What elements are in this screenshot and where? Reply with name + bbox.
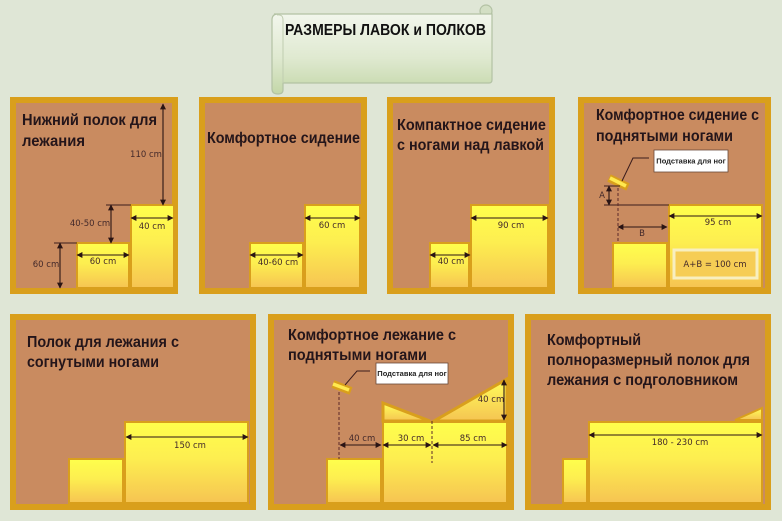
panel heading: с ногами над лавкой	[397, 137, 544, 154]
dimensions	[339, 380, 507, 463]
dimensions: 180 - 230 cm	[652, 438, 708, 448]
panel heading: Комфортное сидение с	[596, 107, 759, 124]
panel heading: лежания с подголовником	[547, 372, 738, 389]
panel: full-size shelf with headrest	[528, 317, 768, 507]
panel heading	[547, 332, 750, 389]
dimensions: 30 cm	[398, 434, 424, 444]
panel heading: Комфортное сидение	[207, 130, 360, 147]
footrest label: Подставка для ног	[656, 156, 726, 166]
panel: comfortable lying with raised legs	[271, 317, 511, 507]
dimensions: 90 cm	[498, 221, 524, 231]
dimensions: 40 cm	[349, 434, 375, 444]
footrest label	[654, 150, 728, 172]
panel: lying shelf with bent legs	[13, 317, 253, 507]
dimensions	[33, 104, 173, 288]
headrest wedges	[383, 379, 507, 421]
dimensions: 150 cm	[174, 441, 206, 451]
panel heading: Полок для лежания с	[27, 334, 179, 351]
panel heading: Комфортный	[547, 332, 641, 349]
benches	[69, 422, 248, 503]
dimensions: A	[599, 191, 605, 201]
panel heading	[596, 107, 759, 145]
dimensions	[126, 437, 248, 451]
footrest label	[376, 363, 448, 384]
dimensions: 60 cm	[90, 257, 116, 267]
panel: compact seat	[390, 100, 552, 291]
footrest leader line	[622, 158, 649, 181]
panel heading: лежания	[22, 133, 85, 150]
dimensions: 40 cm	[139, 222, 165, 232]
dimensions: 95 cm	[705, 218, 731, 228]
icon: footrest	[333, 384, 351, 391]
panel heading: Комфортное лежание с	[288, 327, 456, 344]
dimensions: 40 cm	[478, 395, 504, 405]
headrest wedge	[735, 408, 762, 420]
panel heading: полноразмерный полок для	[547, 352, 750, 369]
dimensions	[599, 186, 762, 243]
panel: comfortable seat	[202, 100, 364, 291]
panel heading: Нижний полок для	[22, 112, 157, 129]
dimensions: 85 cm	[460, 434, 486, 444]
title banner scroll	[272, 5, 492, 94]
benches	[613, 205, 762, 288]
dimensions: 40-50 cm	[70, 219, 110, 229]
dimensions: 40 cm	[438, 257, 464, 267]
panel heading: поднятыми ногами	[288, 347, 427, 364]
dimensions: 60 cm	[319, 221, 345, 231]
panel heading	[397, 117, 546, 154]
panel heading: поднятыми ногами	[596, 128, 733, 145]
dimensions: 40-60 cm	[258, 258, 298, 268]
dimensions	[430, 218, 548, 267]
callout: A+B	[674, 250, 757, 278]
dimensions: B	[639, 229, 645, 239]
panel heading	[27, 334, 179, 371]
title: РАЗМЕРЫ ЛАВОК и ПОЛКОВ	[285, 22, 486, 39]
footrest label: Подставка для ног	[377, 369, 447, 378]
benches	[77, 205, 174, 288]
dimensions: 60 cm	[33, 260, 59, 270]
panel heading: Компактное сидение	[397, 117, 546, 134]
benches	[430, 205, 548, 288]
callout: A+B: A+B = 100 cm	[683, 260, 747, 270]
panel: lower lying shelf	[13, 100, 175, 291]
footrest leader line	[345, 371, 370, 385]
panel heading: согнутыми ногами	[27, 354, 159, 371]
benches	[250, 205, 360, 288]
benches	[327, 422, 507, 503]
icon: footrest	[609, 178, 628, 187]
dimensions: 110 cm	[130, 150, 162, 160]
dimensions	[250, 218, 360, 268]
benches	[563, 422, 762, 503]
panel heading	[22, 112, 157, 150]
panel heading	[288, 327, 456, 364]
panel: comfortable seat with raised legs	[581, 100, 768, 291]
